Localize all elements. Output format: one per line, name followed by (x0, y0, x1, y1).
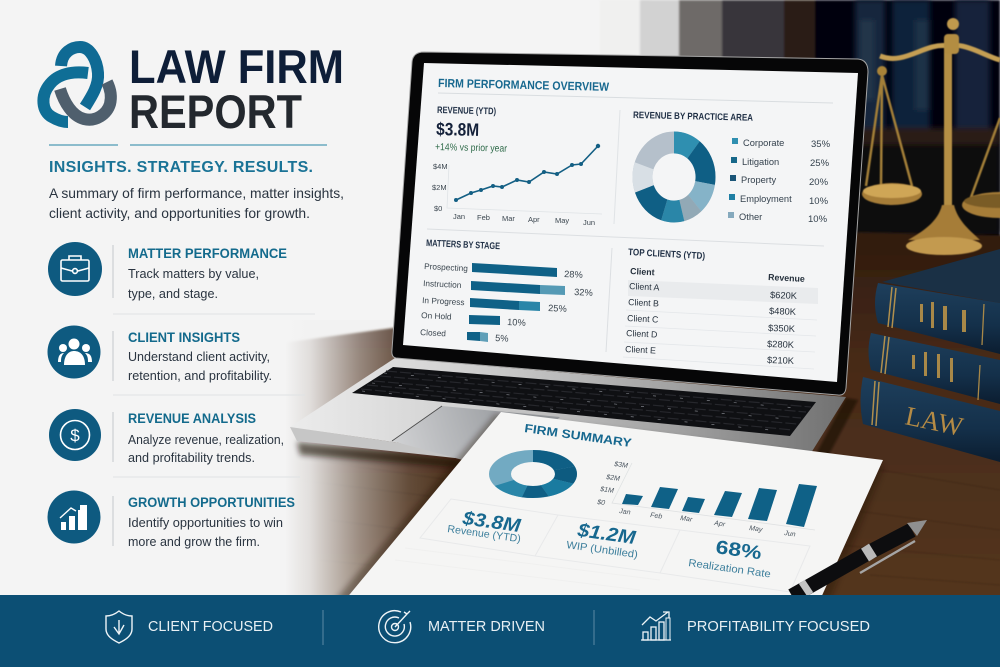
donut legend: Employment (740, 194, 792, 204)
label: profitability focused: PROFITABILITY FOCUSED (687, 619, 870, 635)
book spine decoration (912, 302, 966, 382)
icon: profit chart (641, 612, 671, 640)
donut legend: 10% (808, 214, 828, 225)
label: client focused: CLIENT FOCUSED (148, 619, 273, 635)
panel: revenue line chart: +14% vs prior year (435, 142, 508, 155)
panel: top clients table: $620K (770, 290, 798, 301)
feature: client insights: retention, and profitability. (128, 369, 272, 383)
donut legend: Other (739, 212, 762, 222)
donut legend: Property (741, 175, 776, 185)
panel: revenue by practice area: REVENUE BY PRACTICE AREA (633, 110, 753, 124)
panel: matters by stage: 32% (574, 287, 593, 298)
donut legend: 20% (809, 177, 829, 188)
icon: people (48, 326, 100, 378)
feature: matter performance: type, and stage. (128, 287, 218, 301)
laptop shadow (297, 442, 490, 470)
panel: matters by stage: 10% (507, 317, 526, 328)
donut legend: Litigation (742, 157, 779, 167)
background: left white fade (285, 320, 450, 595)
panel: matters by stage (420, 238, 593, 344)
summary bar chart: $3M (613, 461, 628, 470)
summary metric boxes: WIP (Unbilled) (566, 539, 639, 561)
firm summary paper (335, 412, 885, 600)
icon: shield (106, 611, 132, 643)
feature: matter performance: MATTER PERFORMANCE (128, 246, 287, 261)
panel: top clients table: Client E (625, 344, 656, 356)
summary bar chart: $0 (596, 499, 606, 507)
title: LAW FIRM (129, 40, 344, 93)
panel: revenue line chart: Mar (502, 214, 515, 223)
panel: top clients table: Client (630, 266, 655, 277)
summary bar chart: May (749, 525, 763, 534)
trackpad (392, 406, 560, 470)
donut legend: 10% (809, 196, 829, 207)
stack of law books (860, 249, 1000, 462)
icon: target (379, 611, 411, 643)
panel: top clients table: Client A (629, 281, 660, 293)
footer band (0, 595, 1000, 667)
donut legend: Corporate (743, 138, 784, 148)
feature: client insights: CLIENT INSIGHTS (128, 330, 240, 345)
panel: matters by stage: 28% (564, 269, 583, 280)
intro text (49, 185, 344, 221)
panel: revenue line chart: May (555, 216, 569, 225)
feature: growth opportunities (48, 490, 295, 549)
scales of justice (862, 18, 1000, 255)
summary donut chart (500, 456, 566, 492)
panel: revenue line chart (432, 105, 602, 227)
panel: top clients table: TOP CLIENTS (YTD) (628, 247, 705, 262)
laptop (290, 52, 868, 470)
summary bar chart: Jun (783, 530, 796, 539)
summary bar chart: Feb (650, 512, 663, 521)
summary bar chart: $1M (599, 486, 614, 495)
panel: revenue line chart: $0 (434, 204, 442, 213)
intro text: A summary of firm performance, matter insights, (49, 185, 344, 201)
summary metric boxes: $1.2M (575, 520, 638, 549)
book title: LAW: LAW (903, 401, 966, 442)
panel: top clients table: Client D (626, 328, 658, 340)
summary metric boxes (420, 499, 810, 592)
panel: top clients table: $350K (768, 323, 796, 334)
tagline: INSIGHTS. STRATEGY. RESULTS. (49, 159, 313, 176)
panel: top clients table: Client B (628, 297, 659, 309)
donut legend (728, 138, 831, 225)
summary metric boxes: 68% (714, 537, 763, 564)
summary bar chart: Mar (680, 515, 693, 524)
feature: growth opportunities: GROWTH OPPORTUNITIES (128, 495, 295, 510)
label: matter driven: MATTER DRIVEN (428, 619, 545, 635)
panel: top clients table: $480K (769, 306, 797, 317)
feature: revenue analysis: and profitability trends. (128, 451, 255, 465)
panel: top clients table: Client C (627, 313, 659, 325)
panel: top clients table: Revenue (768, 272, 805, 284)
icon: growth bars (48, 490, 100, 544)
icon: dollar coin: $ (70, 426, 80, 445)
background: wall and bookshelf (600, 0, 1000, 240)
pen (792, 520, 927, 596)
feature: client insights: Understand client activity, (128, 350, 270, 364)
icon: dollar coin (49, 409, 101, 461)
feature: revenue analysis: Analyze revenue, realization, (128, 433, 284, 447)
panel: top clients table (623, 247, 818, 369)
summary bar chart (596, 461, 817, 539)
title (129, 40, 344, 138)
feature: growth opportunities: Identify opportunities to win (128, 516, 283, 530)
panel: top clients table: $210K (767, 355, 795, 366)
background: wooden desk (294, 231, 1000, 595)
summary metric boxes: Revenue (YTD) (447, 523, 522, 545)
donut chart (642, 142, 706, 212)
panel: revenue line chart: $2M (432, 183, 447, 192)
donut legend: 25% (810, 158, 830, 169)
feature: matter performance: Track matters by value, (128, 267, 259, 281)
panel: matters by stage: 25% (548, 303, 567, 314)
wood grain (300, 460, 1000, 585)
feature: matter performance (48, 242, 287, 301)
panel: revenue line chart: REVENUE (YTD) (437, 105, 496, 117)
panel: revenue line chart: Apr (528, 215, 540, 224)
intro text: client activity, and opportunities for growth. (49, 205, 310, 221)
laptop screen (403, 63, 858, 382)
summary metric boxes: $3.8M (460, 508, 523, 537)
panel: matters by stage: Instruction (423, 278, 462, 290)
panel: revenue line chart: $3.8M (436, 119, 479, 140)
panel: matters by stage: MATTERS BY STAGE (426, 238, 500, 252)
panel: revenue by practice area (633, 110, 831, 225)
title: REPORT (129, 85, 302, 138)
feature: revenue analysis: REVENUE ANALYSIS (128, 411, 256, 426)
feature: revenue analysis (49, 409, 284, 465)
panel: matters by stage: 5% (495, 333, 509, 344)
logo: interlocking rings (43, 47, 111, 122)
summary bar chart: $2M (605, 474, 620, 483)
summary metric boxes: Realization Rate (688, 557, 772, 581)
keyboard (352, 367, 816, 436)
panel: revenue line chart: Jan (453, 212, 465, 221)
summary heading: FIRM SUMMARY (524, 421, 632, 450)
summary bar chart: Jan (618, 508, 631, 517)
laptop base deck (290, 358, 846, 453)
panel: matters by stage: Closed (420, 327, 447, 338)
panel: revenue line chart: Jun (583, 218, 595, 227)
panel: matters by stage: On Hold (421, 310, 452, 322)
panel: top clients table: $280K (767, 339, 795, 350)
feature: client insights (48, 326, 272, 383)
panel: matters by stage: Prospecting (424, 261, 469, 273)
screen bezel (392, 52, 868, 395)
feature: growth opportunities: more and grow the firm. (128, 535, 260, 549)
panel: matters by stage: In Progress (422, 295, 465, 307)
summary bar chart: Apr (713, 520, 726, 529)
icon: briefcase (48, 242, 102, 296)
panel: revenue line chart: Feb (477, 213, 490, 222)
panel: revenue line chart: $4M (433, 162, 448, 171)
donut legend: 35% (811, 139, 831, 150)
screen title: FIRM PERFORMANCE OVERVIEW (438, 76, 610, 94)
